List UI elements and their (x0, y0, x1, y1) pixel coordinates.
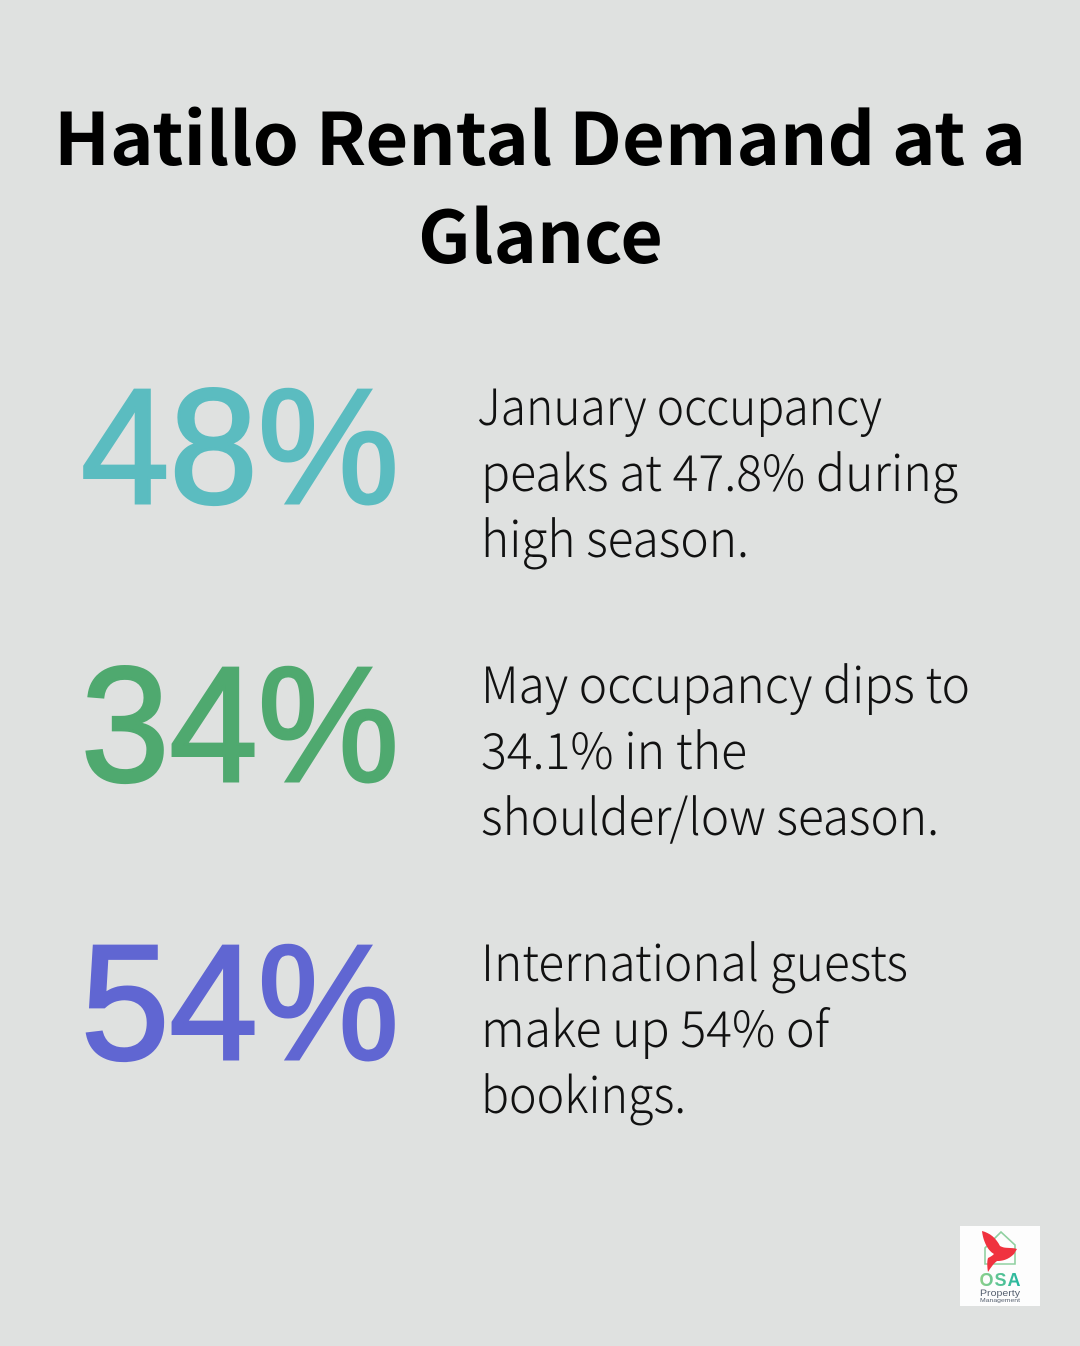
number: 54%: 54% (81, 911, 399, 1094)
description: January occupancy (477, 368, 958, 572)
description: May occupancy: May occupancy dips to (481, 646, 970, 718)
description: International guests (481, 924, 908, 1128)
stat: 54% International guests (81, 911, 908, 1128)
stat: 48% January occupancy (81, 355, 958, 572)
logo: OSA Property Management: Property (980, 1288, 1020, 1299)
description: International guests: International guests (481, 924, 908, 996)
description: January occupancy: January occupancy (477, 368, 882, 440)
logo: OSA Property Management: Management (980, 1298, 1021, 1304)
number: 34%: 34% (81, 633, 399, 816)
title (54, 81, 1026, 284)
description: May occupancy: shoulder/low season. (481, 778, 939, 850)
stat: 34% May occupancy (81, 633, 970, 850)
description: January occupancy: peaks at 47.8% during (481, 434, 958, 506)
logo: OSA Property Management (960, 1226, 1040, 1306)
icon: house outline (985, 1232, 1015, 1264)
title: Hatillo Rental Demand at a (54, 81, 1026, 186)
logo wordmark: OSA (980, 1270, 1020, 1290)
description: May occupancy: 34.1% in the (481, 712, 747, 784)
description: May occupancy (481, 646, 970, 850)
title: Glance (418, 179, 663, 284)
number: 48%: 48% (81, 355, 399, 538)
description: International guests: bookings. (481, 1056, 686, 1128)
description: International guests: make up 54% of (481, 990, 831, 1062)
icon: red bird (982, 1231, 1017, 1272)
description: January occupancy: high season. (481, 500, 749, 572)
